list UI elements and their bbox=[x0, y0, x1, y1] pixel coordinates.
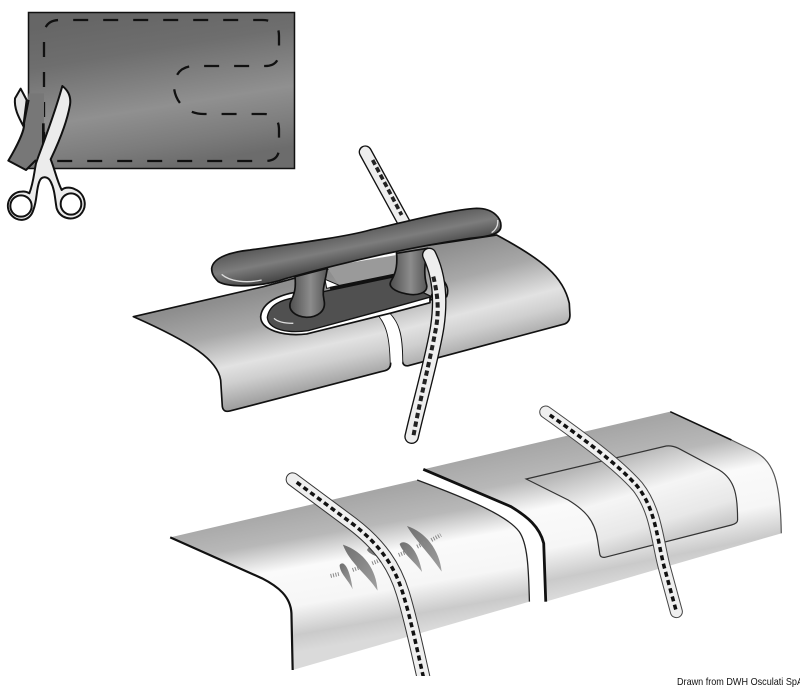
thin right edge of torn board bbox=[417, 480, 529, 602]
left cleat post bbox=[290, 268, 327, 317]
right deck section bbox=[390, 235, 570, 366]
panel: deck with cleat and rope bbox=[133, 152, 570, 437]
left deck section bbox=[133, 267, 391, 411]
white rim of cut-out bbox=[261, 293, 430, 335]
panel: fabric sheet with cutting pattern bbox=[28, 12, 294, 168]
icon: scissors cutting the fabric bbox=[8, 86, 85, 220]
front blade and handles bbox=[8, 86, 85, 220]
deck between posts bbox=[327, 255, 397, 287]
curved far edge bbox=[731, 440, 781, 533]
rear blade bbox=[15, 89, 27, 126]
panel: torn board section with rope bbox=[170, 479, 529, 677]
far edge of board bbox=[670, 412, 731, 440]
dashed cutting line bbox=[44, 20, 279, 161]
right rope bbox=[546, 412, 676, 612]
right cleat post bbox=[390, 248, 427, 295]
fabric rectangle bbox=[28, 12, 294, 168]
highlight on cleat bar bbox=[222, 220, 498, 282]
bump of cut-out behind rope bbox=[430, 277, 448, 300]
cut fabric flap bbox=[8, 93, 44, 170]
highlight on base plate bbox=[274, 318, 293, 323]
small white triangle behind post bbox=[325, 279, 340, 288]
board surface bbox=[423, 412, 781, 602]
lower rope end bbox=[412, 255, 439, 437]
tear marks bbox=[331, 526, 442, 591]
left rope bbox=[293, 479, 423, 677]
slit in the deck bbox=[378, 314, 402, 363]
upper rope end bbox=[365, 152, 404, 223]
right finger hole bbox=[61, 193, 81, 215]
thick left edge of board bbox=[423, 469, 546, 602]
repair patch bbox=[526, 446, 738, 557]
thick left edge of torn board bbox=[170, 537, 293, 670]
cleat base plate bbox=[267, 277, 432, 332]
torn board surface bbox=[170, 480, 529, 670]
panel: repaired board section with patch bbox=[423, 412, 781, 612]
white cover cutting left rope at the bottom bbox=[400, 676, 460, 688]
left finger hole bbox=[10, 195, 32, 217]
dark top edge of base plate bbox=[330, 275, 395, 288]
cleat top bar bbox=[212, 208, 501, 286]
